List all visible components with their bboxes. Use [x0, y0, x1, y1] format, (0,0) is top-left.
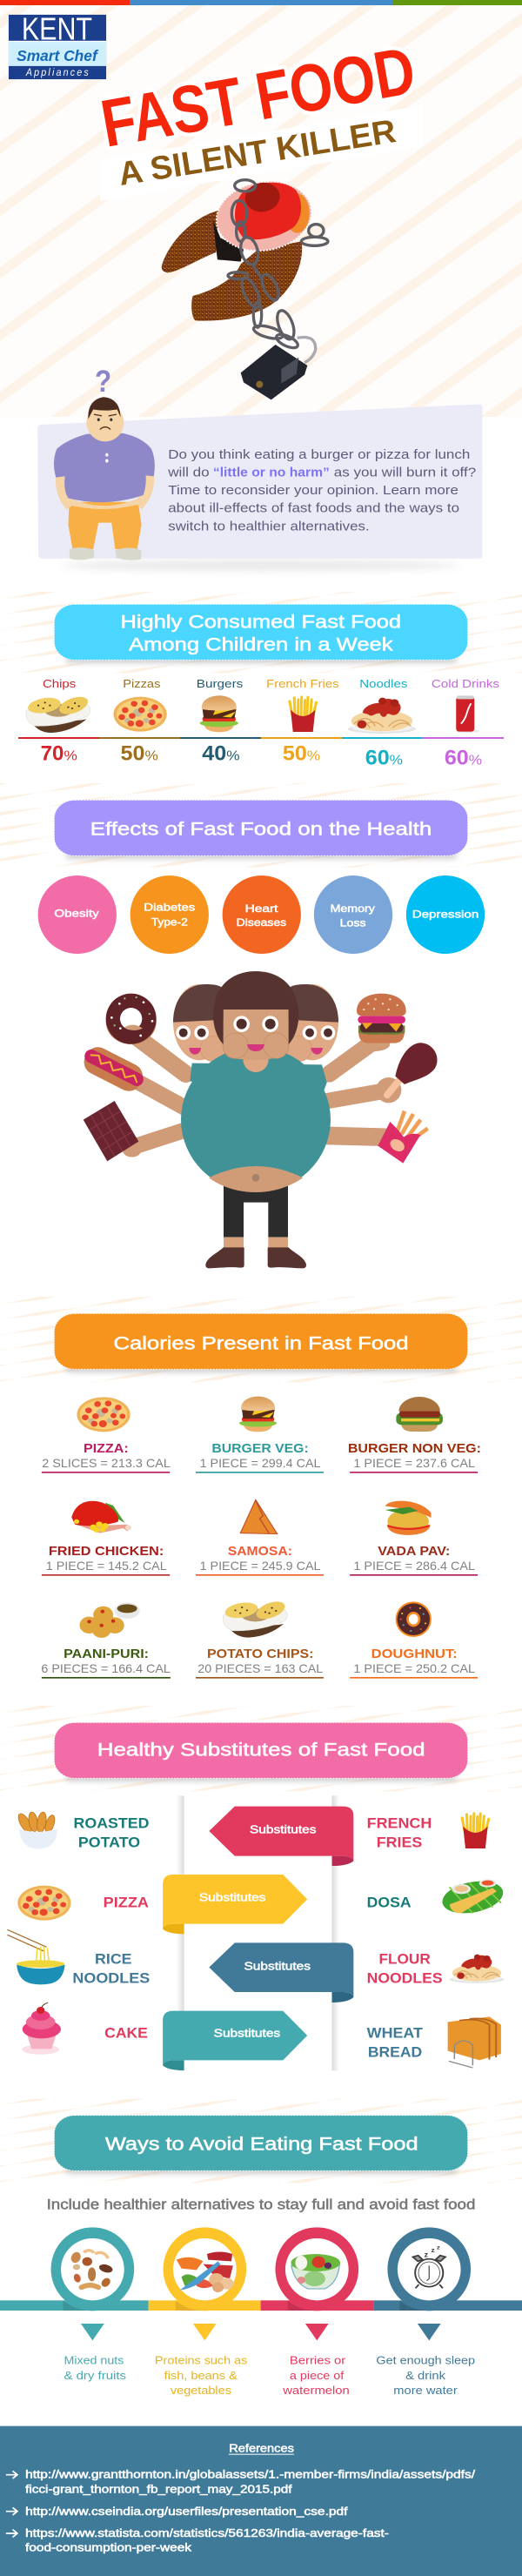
photo: chained cupcake and croissant [162, 174, 328, 399]
obesity: Obesity [54, 908, 99, 919]
pair right labels: DOSA [367, 1894, 412, 1910]
ring: proteins [163, 2227, 246, 2311]
reference list: ficci-grant_thornton_fb_report_may_2015.pdf [25, 2484, 292, 2495]
caption: sleep: more water [393, 2385, 458, 2397]
diabetes: Diabetes [144, 902, 196, 913]
heading: substitutes [54, 1722, 468, 1778]
pair left labels: POTATO [78, 1834, 140, 1850]
item: pizzas 50%: Pizzas [123, 678, 161, 690]
calorie: samosa [196, 1499, 324, 1576]
heading: effects [54, 800, 468, 855]
subheading: Include healthier alternatives to stay full and avoid fast food [47, 2197, 475, 2212]
icon: donut [106, 994, 157, 1044]
icon: hot dog [78, 1042, 149, 1097]
item: noodles 60%: % [390, 754, 403, 768]
heading: effects: Effects of Fast Food on the Health [90, 818, 432, 839]
heart diseases: Heart [245, 902, 278, 915]
intro text: Do you think eating a burger or pizza for lunch [168, 447, 470, 462]
intro text: as you will burn it off? [334, 466, 476, 480]
icon: french fries [462, 1814, 489, 1848]
item: chips 70%: Chips [43, 678, 76, 690]
calorie: paani puri: 6 PIECES = 166.4 CAL [41, 1663, 171, 1676]
title: fast food: FAST FOOD [96, 33, 420, 162]
calorie: burger non veg: BURGER NON VEG: [348, 1442, 481, 1456]
item: pizzas 50%: 50 [121, 742, 144, 765]
calorie: doughnut: 1 PIECE = 250.2 CAL [353, 1663, 475, 1676]
obesity [38, 875, 117, 954]
reference list: http://www.cseindia.org/userfiles/presentation_cse.pdf [25, 2506, 348, 2518]
item: chips 70%: % [64, 749, 77, 763]
heart diseases: Diseases [237, 916, 286, 929]
item: cold drinks 60%: 60 [445, 747, 469, 769]
item: french fries 50% [261, 678, 342, 765]
item: burgers 40%: Burgers [197, 678, 244, 690]
effects circles [38, 875, 485, 954]
references footer [0, 2426, 522, 2576]
item: french fries 50%: French Fries [266, 678, 339, 690]
intro text: Time to reconsider your opinion. Learn more [168, 483, 458, 498]
icon: roasted potato [16, 1812, 57, 1849]
pair right labels: FRENCH [367, 1815, 432, 1831]
KENT logo: Smart Chef [17, 48, 98, 64]
heading: ways to avoid [54, 2116, 468, 2170]
calorie: pizza: PIZZA: [84, 1442, 129, 1456]
caption: berries: Berries or [290, 2355, 346, 2366]
calorie: potato chips: 20 PIECES = 163 CAL [197, 1663, 323, 1676]
icon: burger [357, 994, 406, 1051]
item: french fries 50%: % [307, 749, 320, 763]
depression: Depression [412, 909, 478, 920]
pair right labels: NOODLES [367, 1969, 443, 1986]
memory loss: Memory [331, 902, 375, 915]
pair right labels [367, 1815, 443, 2060]
calorie: samosa: 1 PIECE = 245.9 CAL [200, 1560, 320, 1573]
heading: calories: Calories Present in Fast Food [113, 1332, 409, 1353]
ribbon: french fries to roasted potato: Substitutes [250, 1824, 317, 1835]
icon: flour noodles [450, 1955, 504, 1983]
caption: nuts: Mixed nuts [64, 2355, 124, 2366]
question mark: ? [95, 365, 111, 399]
icon: cupcake [22, 2002, 61, 2055]
calorie: vada pav: 1 PIECE = 286.4 CAL [353, 1560, 475, 1573]
heading: calories [54, 1313, 468, 1369]
ribbon: pizza to dosa [163, 1875, 307, 1934]
sleep letters: z [432, 2246, 435, 2254]
section: ways to avoid [0, 2099, 522, 2340]
ribbon: french fries to roasted potato [209, 1807, 353, 1866]
pointers [81, 2324, 441, 2340]
diabetes: Type-2 [151, 916, 188, 928]
pair left labels: RICE [95, 1950, 132, 1967]
pair left labels: NOODLES [72, 1969, 150, 1986]
diabetes [130, 875, 209, 954]
icon: soda can [456, 695, 479, 733]
section: highly consumed fast food [0, 592, 522, 868]
heading: highly consumed: Highly Consumed Fast Food [121, 611, 401, 632]
KENT logo: KENT [22, 12, 92, 47]
legs and shoes [205, 1181, 306, 1268]
caption: sleep: Get enough sleep [376, 2355, 475, 2366]
reference list: https://www.statista.com/statistics/561263/india-average-fast- [25, 2527, 389, 2539]
sleep letters [424, 2244, 440, 2258]
icon: chocolate bar [84, 1101, 141, 1161]
ribbon: cake to wheat bread [163, 2011, 307, 2070]
calorie: pizza [42, 1397, 171, 1473]
heading: highly consumed [54, 604, 468, 660]
icon: pizza [17, 1886, 71, 1921]
intro text: about ill-effects of fast foods and the ways to [168, 501, 459, 516]
torso [181, 1047, 331, 1192]
item: pizzas 50% [99, 678, 180, 765]
icon: wheat bread [448, 2016, 501, 2068]
icon: salad bowl [291, 2254, 340, 2289]
pair left labels [72, 1815, 150, 2041]
pair right labels: BREAD [368, 2043, 422, 2060]
caption: sleep [376, 2355, 475, 2397]
calorie: pizza: 2 SLICES = 213.3 CAL [42, 1458, 171, 1471]
item: chips 70% [18, 678, 99, 765]
icon: chicken drumstick [376, 1043, 438, 1103]
item: burgers 40%: 40 [202, 742, 226, 765]
KENT logo [9, 12, 106, 79]
icon: mixed nuts [70, 2251, 114, 2288]
illustration: many-armed overeater [78, 971, 438, 1268]
caption: berries: watermelon [282, 2385, 350, 2397]
sleep letters: z [424, 2251, 428, 2258]
top colour bar [0, 0, 522, 5]
caption: sleep: & drink [405, 2370, 445, 2382]
caption: nuts: & dry fruits [64, 2370, 126, 2382]
pair right labels: WHEAT [367, 2024, 423, 2041]
calorie: fried chicken: FRIED CHICKEN: [49, 1545, 164, 1559]
back heads [173, 984, 338, 1062]
heading: highly consumed: Among Children in a Week [129, 634, 393, 654]
icon: fish, meat and eggs [177, 2251, 234, 2292]
calorie: burger non veg [348, 1397, 481, 1473]
intro panel [37, 404, 482, 571]
sleep letters: z [437, 2244, 440, 2251]
pair left labels: PIZZA [104, 1894, 149, 1910]
ring: sleep [387, 2227, 471, 2311]
calorie: paani puri [41, 1602, 171, 1679]
item: noodles 60%: 60 [365, 747, 390, 769]
calorie: potato chips [196, 1598, 324, 1679]
hero background stripes [0, 5, 522, 417]
ring: nuts [51, 2227, 134, 2311]
caption: proteins: fish, beans & [164, 2370, 238, 2382]
band [0, 2300, 522, 2311]
reference list: food-consumption-per-week [25, 2542, 191, 2553]
calorie: fried chicken [42, 1501, 170, 1576]
item: burgers 40% [180, 678, 261, 765]
calorie: samosa: SAMOSA: [228, 1545, 292, 1559]
calorie: doughnut [350, 1601, 478, 1679]
icon: alarm clock [412, 2256, 445, 2288]
calorie: burger veg [196, 1397, 324, 1473]
depression [406, 875, 485, 954]
pair right labels: FLOUR [378, 1950, 431, 1967]
calorie: vada pav: VADA PAV: [378, 1545, 450, 1559]
captions [64, 2355, 475, 2397]
caption: nuts [64, 2355, 126, 2382]
KENT logo: Appliances [25, 68, 89, 78]
arms [132, 1036, 385, 1147]
section: calories [0, 1297, 522, 1679]
item: french fries 50%: 50 [283, 742, 307, 765]
intro section [37, 365, 482, 571]
heart diseases [223, 875, 301, 954]
caption: berries: a piece of [290, 2370, 344, 2382]
intro text [167, 447, 476, 534]
caption: berries [282, 2355, 350, 2397]
reference list: http://www.grantthornton.in/globalassets/1.-member-firms/india/assets/pdfs/ [25, 2469, 475, 2480]
calorie: doughnut: DOUGHNUT: [371, 1647, 458, 1661]
item: chips 70%: 70 [41, 742, 64, 765]
calorie: fried chicken: 1 PIECE = 145.2 CAL [46, 1560, 167, 1573]
calorie: burger non veg: 1 PIECE = 237.6 CAL [353, 1458, 475, 1471]
pair left labels: CAKE [104, 2024, 148, 2041]
item: noodles 60% [342, 678, 423, 769]
memory loss [314, 875, 392, 954]
heading: substitutes: Healthy Substitutes of Fast Food [97, 1739, 425, 1760]
intro text: “little or no harm” [213, 466, 330, 480]
calorie: paani puri: PAANI-PURI: [64, 1647, 149, 1661]
icon: dosa [438, 1876, 507, 1918]
icon: fries box [378, 1111, 428, 1164]
item: pizzas 50%: % [144, 749, 158, 763]
calorie: burger veg: BURGER VEG: [211, 1442, 309, 1456]
ribbon: cake to wheat bread: Substitutes [214, 2028, 280, 2039]
item: burgers 40%: % [226, 749, 240, 763]
icon: rice noodles bowl [7, 1929, 65, 1984]
ribbon: flour noodles to rice noodles: Substitutes [244, 1960, 311, 1972]
caption: proteins: vegetables [171, 2385, 231, 2397]
pair left labels: ROASTED [74, 1815, 149, 1831]
ribbon: flour noodles to rice noodles [209, 1942, 353, 2002]
memory loss: Loss [340, 917, 366, 929]
references title: References [229, 2443, 294, 2454]
subtitle: a silent killer: A SILENT KILLER [116, 113, 398, 193]
intro text: will do [167, 466, 210, 480]
calorie: potato chips: POTATO CHIPS: [207, 1647, 313, 1661]
reference list [6, 2469, 475, 2553]
intro text: switch to healthier alternatives. [168, 520, 370, 534]
caption: proteins [155, 2355, 247, 2397]
item: cold drinks 60% [423, 678, 504, 769]
calorie: vada pav [350, 1501, 478, 1576]
item: cold drinks 60%: % [469, 754, 482, 768]
heading: ways to avoid: Ways to Avoid Eating Fast Food [105, 2133, 418, 2154]
character: worried man [54, 397, 155, 560]
item: cold drinks 60%: Cold Drinks [432, 678, 499, 690]
front head [213, 971, 298, 1072]
section: substitutes [0, 1706, 522, 2070]
pair right labels: FRIES [377, 1834, 422, 1850]
ribbon: pizza to dosa: Substitutes [199, 1891, 266, 1903]
calorie: burger veg: 1 PIECE = 299.4 CAL [200, 1458, 320, 1471]
ring: salad [275, 2227, 358, 2311]
item: noodles 60%: Noodles [359, 678, 408, 690]
caption: proteins: Proteins such as [155, 2355, 247, 2366]
